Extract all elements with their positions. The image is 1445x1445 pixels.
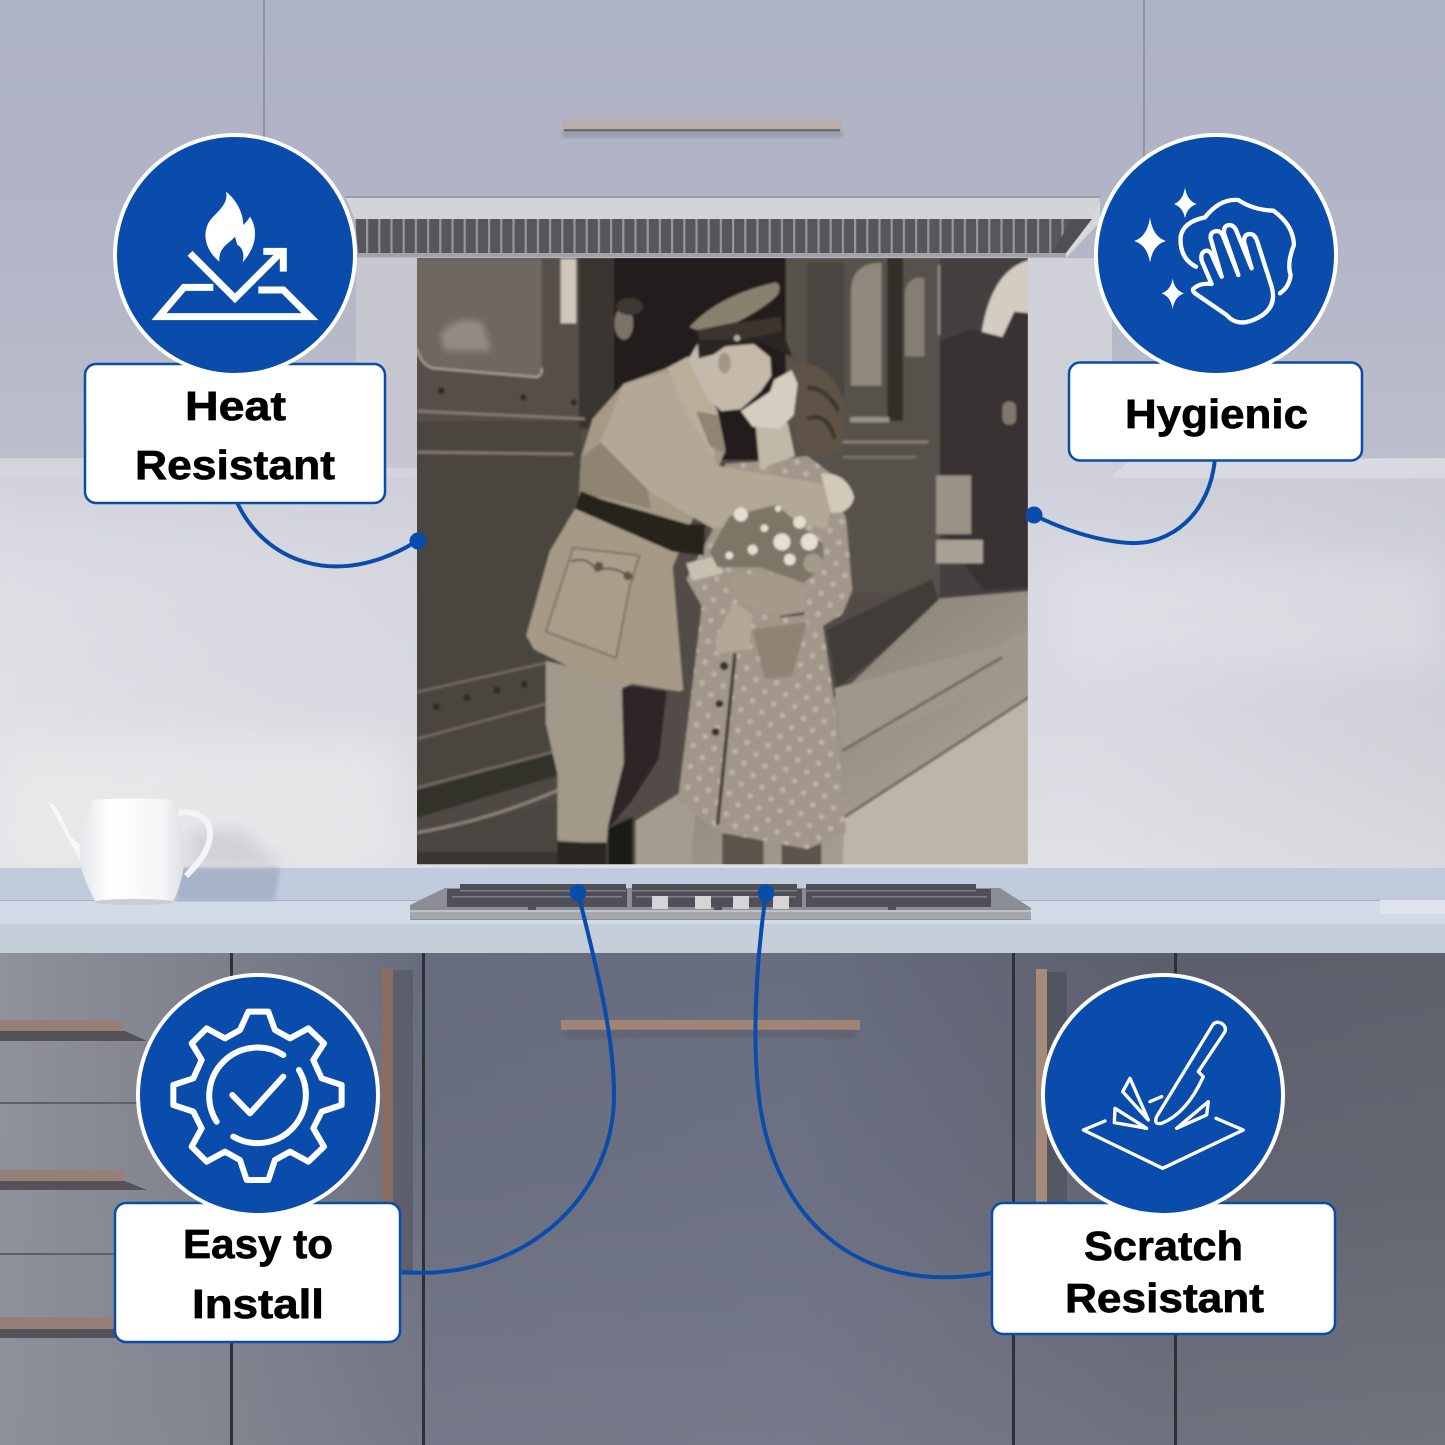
label text [1065,1223,1264,1321]
label box [1069,362,1362,460]
body trim lines [417,411,585,454]
tunic pocket [546,548,639,658]
train carriage [417,258,1028,822]
icon: flame on surface [159,192,310,317]
gas hob [410,884,1031,920]
burner grates [447,884,991,910]
badge circle [1096,135,1336,375]
tiled wall [0,450,1445,870]
callout: easy to install [115,975,400,1342]
counter and backsplash upstand [0,868,1445,953]
badge circle [1043,975,1283,1215]
label text: Scratch [1084,1223,1243,1269]
callout: scratch resistant [992,975,1335,1334]
badge circle [115,135,355,375]
label text: Hygienic [1125,391,1308,437]
carriage window [413,259,542,377]
connector: scratch resistant [755,884,992,1277]
extractor hood [345,196,1100,258]
icon: knife scratching surface [1083,1022,1243,1168]
woman head [741,363,844,469]
man trousers and boots [546,661,667,870]
label text: Easy to [183,1221,333,1267]
label box [992,1203,1335,1334]
vertical handles [393,970,413,1275]
icon: gear with check [173,1012,342,1180]
man tunic [526,356,831,691]
connector: easy to install [402,884,614,1273]
gloved hands [729,573,805,616]
icon: hand wiping with sparkles [1134,187,1294,322]
cabinet handle [562,119,842,138]
connector: hygienic [1026,458,1215,543]
hand on shoulder [821,473,854,513]
centre door handle [561,1020,860,1030]
product photo: soldier and woman kissing at train [413,251,1034,872]
right windows and carriage [786,257,940,593]
woman legs [721,832,765,864]
label box [115,1203,400,1342]
upper cabinets [0,0,1445,460]
lower cabinets [0,953,1445,1445]
label text [135,383,335,488]
label text: Heat [185,383,286,429]
label text: Resistant [1065,1275,1264,1321]
connector: heat resistant [236,500,426,566]
man head [688,282,792,411]
badge circle [138,975,378,1215]
lower skirt [827,579,940,688]
label box [85,364,385,503]
label text: Resistant [135,442,335,488]
drawer handles [0,1031,147,1041]
platform [690,590,1028,864]
callout: hygienic [1069,135,1362,460]
flower bouquet [686,505,823,653]
woman coat [678,456,852,849]
callout: heat resistant [85,135,385,503]
belt [575,491,705,556]
doorway [614,257,786,460]
label text: Install [192,1281,324,1327]
label text [183,1221,333,1327]
white kettle [48,798,285,905]
distant arch and figures [940,257,1034,600]
